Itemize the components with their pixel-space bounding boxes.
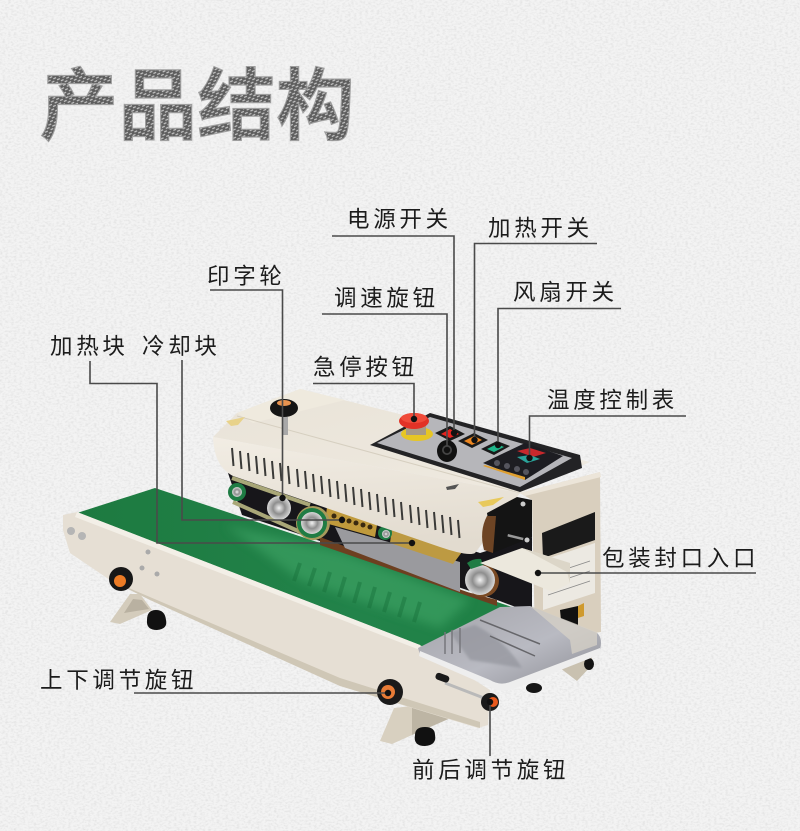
- black end plate: [482, 497, 532, 553]
- callout: 调速旋钮: 调速旋钮: [334, 286, 439, 311]
- callout: 冷却块: 冷却块: [142, 334, 221, 359]
- callout: 上下调节旋钮: 上下调节旋钮: [40, 668, 197, 693]
- callout: 冷却块: [142, 334, 345, 523]
- machine underside and belts: [228, 473, 532, 613]
- callout: 急停按钮: [313, 355, 418, 422]
- green conveyor belt: [77, 488, 545, 650]
- title: 产品结构: [40, 62, 355, 150]
- callout: 包装封口入口: [535, 546, 759, 576]
- lower adjustment knob: left: [109, 567, 133, 591]
- temperature controller: [483, 443, 563, 480]
- power socket: [560, 606, 578, 630]
- front cover with vents: [213, 417, 520, 554]
- callout: 上下调节旋钮: [40, 668, 391, 696]
- handle: [542, 512, 595, 558]
- gold cooling block: [325, 507, 377, 537]
- callout: 加热开关: [471, 216, 597, 443]
- heating switch: [458, 433, 488, 448]
- callout: 风扇开关: 风扇开关: [513, 280, 618, 305]
- callout: 加热开关: 加热开关: [488, 216, 593, 241]
- top cover: [213, 389, 590, 493]
- control panel: [370, 413, 582, 492]
- callout: 印字轮: 印字轮: [207, 264, 286, 289]
- side box: [520, 472, 601, 640]
- wheels: [228, 483, 499, 597]
- speed knob: [437, 440, 457, 462]
- front-back adjustment knob: [435, 672, 499, 711]
- conveyor foot: left: [110, 594, 166, 630]
- inlet tray: [480, 548, 570, 592]
- callout: 电源开关: [332, 207, 457, 436]
- callout: 调速旋钮: [322, 286, 450, 453]
- emergency stop button: [399, 413, 433, 441]
- callout: 印字轮: [207, 264, 286, 501]
- stainless feeding plate: [418, 606, 601, 690]
- callout: 温度控制表: 温度控制表: [547, 388, 678, 413]
- gold heating block: [390, 528, 462, 564]
- callout: 前后调节旋钮: [412, 699, 569, 783]
- data plate: [543, 543, 595, 610]
- callout: 温度控制表: [526, 388, 686, 461]
- fan switch: [481, 441, 510, 455]
- callout: 风扇开关: [495, 280, 621, 448]
- power switch: [435, 426, 465, 441]
- lower adjustment knob: centre: [377, 679, 403, 705]
- callout: 前后调节旋钮: 前后调节旋钮: [412, 758, 569, 783]
- callout: 包装封口入口: 包装封口入口: [602, 546, 759, 571]
- callout: 电源开关: 电源开关: [347, 207, 452, 232]
- conveyor side rail: [63, 512, 490, 728]
- callout: 加热块: 加热块: [50, 334, 129, 359]
- sealing machine illustration: [63, 389, 601, 746]
- conveyor foot: right: [380, 704, 453, 746]
- callout: 急停按钮: 急停按钮: [313, 355, 418, 380]
- top adjustment knob: [270, 399, 298, 435]
- plate support and rubber feet: [526, 655, 594, 693]
- callout: 加热块: [50, 334, 415, 546]
